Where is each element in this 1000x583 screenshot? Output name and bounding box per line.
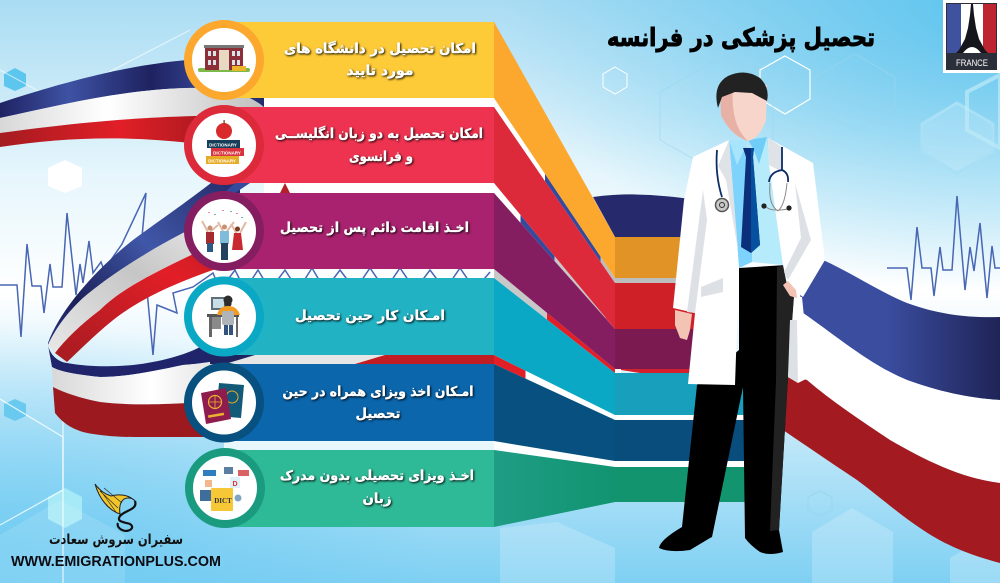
bar 3 [224,193,615,369]
trousers [659,265,794,554]
ribbon: diagonal left [48,172,240,362]
text bar 5 [282,384,474,422]
icon circle 2: dictionaries and apple: DICTIONARY [208,158,236,164]
left coat and sleeve [673,140,739,385]
text bar 1: امکان تحصیل در دانشگاه های [284,40,476,57]
bar 5 [224,364,615,461]
text bar 6 [280,468,474,507]
bar 1 [224,22,615,278]
text bar 6: اخـذ ویزای تحصیلی بدون مدرک [280,468,474,484]
bar 4 [224,278,615,415]
doctor illustration [659,72,825,554]
ribbon: lower left loop [48,335,300,437]
icon: winged bird [95,484,135,531]
text bar 5: تحصیل [356,406,400,422]
France label: FRANCE [956,58,988,69]
text bar 5: امـکان اخذ ویزای همراه در حین [282,384,474,400]
ribbon: right large [780,250,1000,563]
icon circle 4: person at desk [188,280,260,352]
icon circle 5: passports [188,366,260,438]
France flag badge [943,0,1000,73]
shirt [729,137,783,268]
ribbon arch behind doctor [593,194,720,237]
tie [741,148,760,253]
head [716,72,768,141]
icon circle 2: dictionaries and apple: DICTIONARY [209,142,237,148]
icon circle 1: university [188,24,260,96]
hands [675,281,797,340]
website: WWW.EMIGRATIONPLUS.COM [11,553,221,570]
back bars behind doctor [615,237,745,502]
icon circle 6: language dictionaries: D [232,481,238,488]
stethoscope [716,147,792,212]
icon circle 6: language dictionaries [189,452,261,524]
icon: Eiffel tower [956,4,988,53]
text bar 2: امکان تحصیل به دو زبان انگلیســی [275,125,483,142]
text bar 2: و فرانسوی [349,149,413,165]
bar 2 [224,107,615,329]
right coat and sleeve [768,138,825,383]
heartbeat line left [0,193,490,355]
icon circle 2: dictionaries and apple [188,109,260,181]
text bar 4: امـکان کار حین تحصیل [295,308,445,324]
text bar 6: زبان [362,491,392,507]
gap fragments between bars [210,98,615,467]
icon circle 6: language dictionaries: DICT [214,497,232,505]
icon circle 2: dictionaries and apple: DICTIONARY [213,150,241,156]
title: تحصیل پزشکی در فرانسه [607,23,875,53]
text bar 3: اخـذ اقامت دائم پس از تحصیل [280,220,469,236]
heartbeat line right [887,196,1000,300]
logo name: سفیران سروش سعادت [49,532,183,548]
text bar 2 [275,125,483,165]
ribbon: top left French colours [0,58,275,147]
bar 6 [224,450,615,527]
icon circle 3: celebrating people [188,195,260,267]
logo [11,484,221,570]
text bar 1: مورد تایید [346,63,414,79]
text bar 1 [284,40,476,79]
